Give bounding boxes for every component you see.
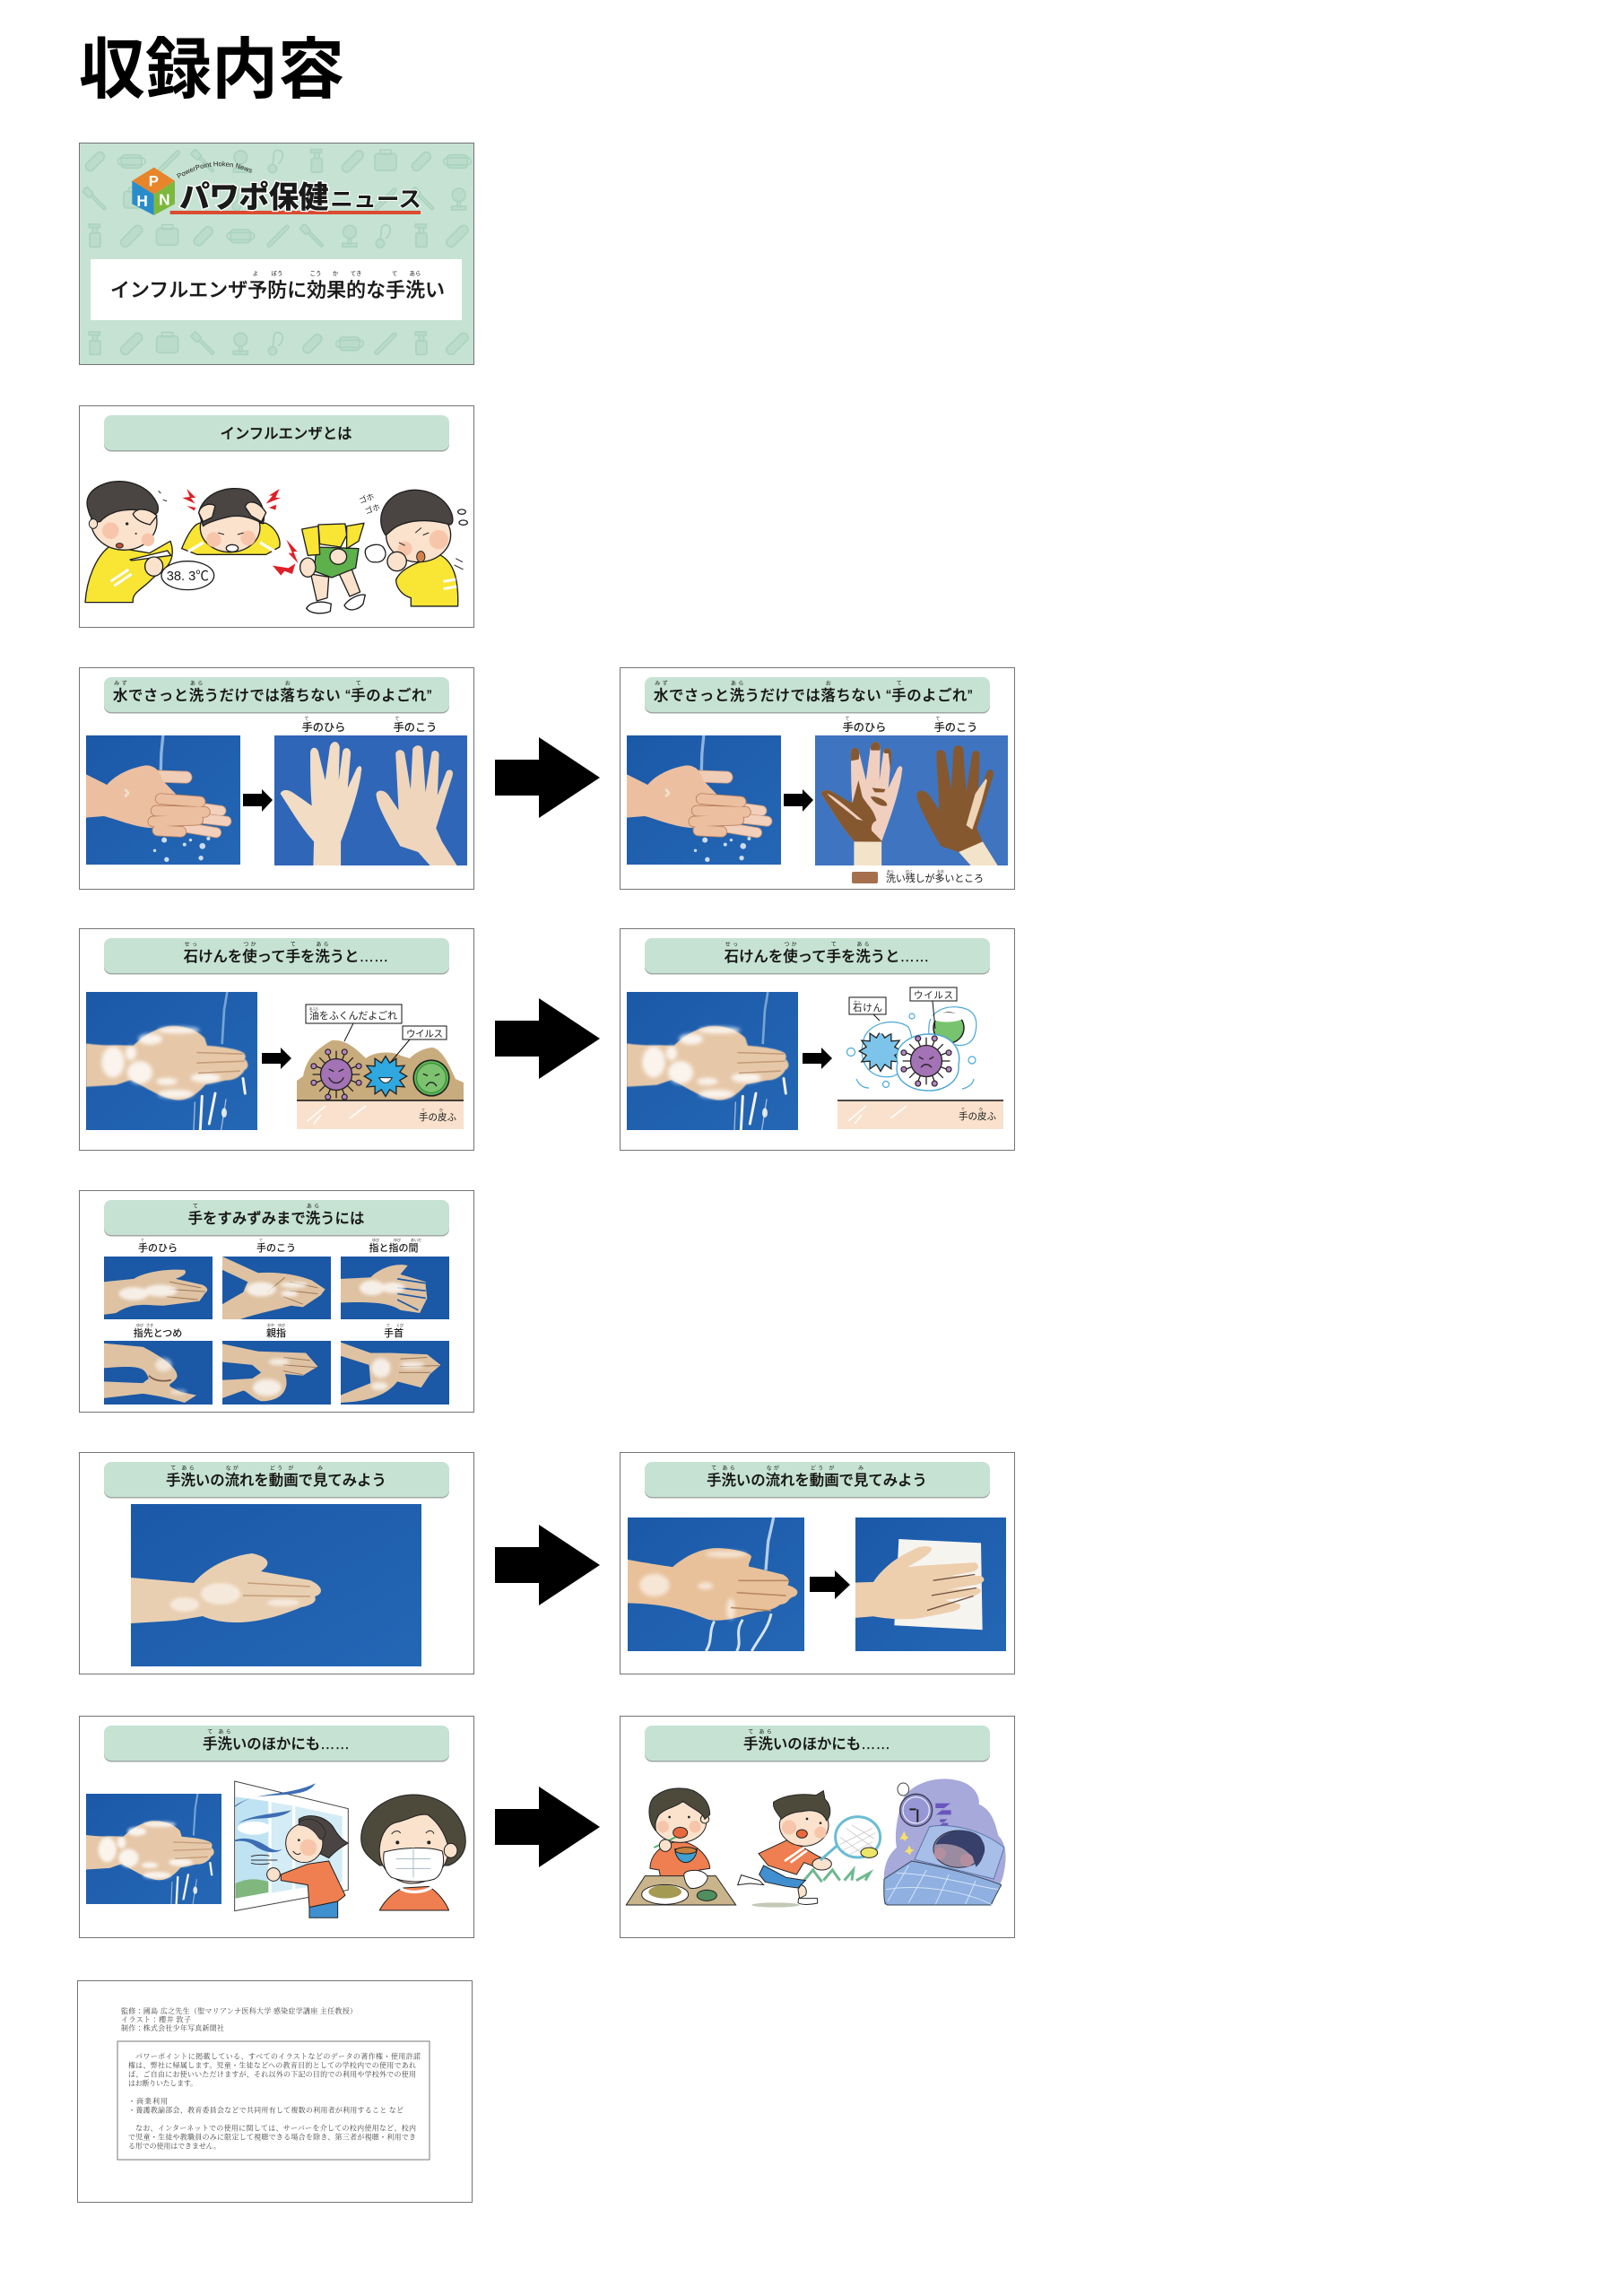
title box: インフルエンザ予防に効果的な手洗い: [90, 258, 461, 319]
photo: 手のこう: て: [258, 1238, 262, 1241]
logo: PowerPoint Hoken News: H: [136, 191, 147, 209]
panel: 動画 (after): [620, 1452, 1015, 1674]
photo: soapy hands: [86, 992, 256, 1130]
labels: て: [845, 716, 849, 721]
legend: 洗い残しが多いところ: [886, 872, 983, 884]
logo: PowerPoint Hoken News: PowerPoint Hoken News: [177, 161, 253, 178]
heading: [644, 677, 990, 712]
photo: 親指: おや: [267, 1322, 274, 1327]
panel: 手をすみずみまで洗うには: [79, 1190, 474, 1413]
heading: 水みず でさっと洗あら うだけでは落お ちない “手て のよごれ”: [113, 682, 432, 704]
photo: rinsing hands: [626, 735, 780, 865]
legend: のこ: [906, 868, 913, 874]
illustration: child playing tennis: [737, 1790, 880, 1907]
terms box: ば、ご自由にお使いいただけますが、それ以外の下記の目的での利用や学校外での使用: [127, 2069, 416, 2078]
heading: [104, 677, 448, 712]
illustration: boy coughing: ゴホ: [357, 491, 375, 505]
heading: [104, 938, 448, 973]
photo: 親指: 親指: [265, 1326, 285, 1338]
photo: 手首: [341, 1322, 448, 1405]
terms box: はお断りいたします。: [127, 2078, 197, 2087]
photo: 指と指の間: 指と指の間: [369, 1241, 418, 1254]
label: 石けん: せっ: [854, 999, 860, 1003]
diagram: dirt on skin: [296, 1039, 463, 1128]
heading: [104, 1462, 448, 1497]
title box: インフルエンザ予防に効果的な手洗い: てき: [350, 269, 361, 276]
photo: 指先とつめ: ゆび: [136, 1322, 143, 1327]
label: 手の皮ふ: ひ: [439, 1107, 443, 1112]
panel: 手のよごれ (after): [620, 667, 1015, 890]
label: 石けん: [848, 997, 886, 1021]
photo: 手のこう: [222, 1238, 330, 1318]
panel: cover slide: [79, 143, 474, 365]
labels: 手のひら: [301, 719, 345, 734]
heading: 手て 洗あら いの流なが れを動どう 画が で見み てみよう: [707, 1466, 927, 1489]
legend: おお: [936, 868, 943, 874]
title box: インフルエンザ予防に効果的な手洗い: こう: [309, 269, 321, 276]
diagram: soap lifts dirt: [838, 1006, 1002, 1128]
labels: て: [935, 716, 940, 721]
photo: 親指: ゆび: [278, 1322, 285, 1327]
terms box: パワーポイントに掲載している、すべてのイラストなどのデータの著作権・使用許諾: [135, 2051, 420, 2060]
arrow: [809, 1570, 850, 1598]
heading: 水みず でさっと洗あら うだけでは落お ちない “手て のよごれ”: [654, 682, 973, 704]
label: 手の皮ふ: て: [961, 1107, 965, 1110]
photo: rinsing hands: [86, 735, 240, 865]
labels: て: [304, 716, 308, 721]
terms box: る形での使用はできません。: [127, 2141, 221, 2150]
illustration: child eating: [626, 1787, 735, 1904]
panel: credits and terms: [77, 1980, 473, 2203]
label: ウイルス: [909, 987, 956, 1028]
heading: 手て 洗あら いのほかにも……: [203, 1730, 350, 1752]
panel: インフルエンザとは: [79, 405, 474, 628]
photo: towel drying: [855, 1518, 1006, 1650]
panel: 動画 (before): [79, 1452, 474, 1674]
photo: video still: [131, 1503, 421, 1666]
photo: 親指: [222, 1322, 330, 1405]
credits: 制作：株式会社少年写真新聞社: [120, 2023, 224, 2032]
heading: [644, 1726, 990, 1761]
heading: 石せっ けんを使つか って手て を洗あら うと……: [184, 943, 388, 965]
terms box: で児童・生徒や教職員のみに限定して視聴できる場合を除き、第三者が視聴・利用でき: [127, 2132, 416, 2141]
labels: て: [395, 716, 399, 721]
panel: 手のよごれ (before): [79, 667, 474, 890]
heading: [644, 938, 990, 973]
labels: 手のこう: [933, 719, 977, 734]
heading: [104, 415, 448, 450]
heading: 手て 洗あら いの流なが れを動どう 画が で見み てみよう: [166, 1466, 386, 1489]
title box: インフルエンザ予防に効果的な手洗い: ぼう: [271, 269, 282, 276]
legend: あら: [886, 868, 893, 874]
title box: インフルエンザ予防に効果的な手洗い: あら: [409, 269, 421, 276]
terms box: ・養護教諭部会、教育委員会などで共同所有して複数の利用者が利用すること など: [127, 2105, 404, 2114]
photo: 手のひら: [104, 1238, 212, 1318]
label: 油をふくんだよごれ: 油をふくんだよごれ: [308, 1008, 396, 1021]
photo: 手のひら: て: [140, 1238, 143, 1241]
photo: 手のひら: 手のひら: [138, 1241, 178, 1254]
labels: [842, 716, 977, 734]
illustration: boy with headache: [181, 488, 281, 554]
heading: 石せっ けんを使つか って手て を洗あら うと……: [725, 943, 929, 965]
photo: soapy hands: [86, 1794, 221, 1903]
label: 手の皮ふ: [958, 1107, 996, 1121]
heading: [104, 1200, 448, 1235]
logo: PowerPoint Hoken News: ニュース: [330, 187, 421, 212]
arrow: [784, 789, 812, 811]
heading: [644, 1462, 990, 1497]
big arrow: [495, 737, 600, 818]
title: 収録内容: [79, 32, 344, 107]
label: 手の皮ふ: て: [421, 1107, 425, 1112]
panel: 手洗いのほかにも (after): [620, 1716, 1015, 1938]
photo: 手首: くび: [396, 1322, 404, 1327]
label: 手の皮ふ: 手の皮ふ: [418, 1110, 456, 1123]
illustration: boy with joint pain: [272, 523, 365, 613]
illustration: opening window: [234, 1780, 348, 1918]
illustration: child sleeping: [883, 1779, 1005, 1904]
big arrow: [495, 998, 600, 1079]
illustration: child with mask: [360, 1794, 465, 1909]
arrow: [802, 1048, 832, 1069]
photo: hands with unwashed areas: [814, 735, 1008, 865]
logo: PowerPoint Hoken News: N: [159, 190, 169, 208]
terms box: 権は、弊社に帰属します。児童・生徒などへの教育目的としての学校内での使用であれ: [127, 2060, 416, 2069]
photo: 指と指の間: ゆび: [371, 1236, 378, 1241]
panel: 石けん (after): [620, 928, 1015, 1151]
logo: PowerPoint Hoken News: パワポ保健: [178, 180, 328, 214]
label: 油をふくんだよごれ: [305, 1004, 402, 1040]
terms box: なお、インターネットでの使用に関しては、サーバーを介しての校内使用など、校内: [135, 2123, 416, 2132]
photo: 手のこう: 手のこう: [256, 1241, 296, 1254]
photo: 指先とつめ: さき: [145, 1322, 152, 1327]
logo: PowerPoint Hoken News: [132, 161, 421, 215]
photo: 指と指の間: ゆび: [393, 1236, 400, 1241]
terms box: ・商業利用: [127, 2096, 167, 2105]
photo: clean hands: [274, 735, 466, 865]
illustration: boy coughing: [357, 490, 467, 605]
credits: [120, 2005, 357, 2032]
label: ウイルス: ウイルス: [913, 990, 952, 1001]
label: 手の皮ふ: [418, 1107, 456, 1123]
panel: 手洗いのほかにも (before): [79, 1716, 474, 1938]
big arrow: [495, 1787, 600, 1867]
heading: インフルエンザとは: [220, 426, 352, 442]
credits: イラスト：櫻井 敦子: [120, 2014, 190, 2023]
labels: 手のこう: [393, 719, 437, 734]
title box: インフルエンザ予防に効果的な手洗い: て: [391, 271, 397, 276]
illustration: boy with fever: [84, 481, 213, 602]
photo: rinsing soap: [628, 1518, 803, 1650]
legend: [852, 868, 983, 884]
background health icon pattern: [82, 149, 471, 356]
panel: 石けん (before): [79, 928, 474, 1151]
photo: 手首: 手首: [384, 1326, 404, 1338]
credits: 監修：國島 広之先生（聖マリアンナ医科大学 感染症学講座 主任教授）: [120, 2005, 357, 2014]
big arrow: [495, 1525, 600, 1605]
logo: PowerPoint Hoken News: P: [148, 172, 158, 189]
labels: [301, 716, 437, 734]
label: 手の皮ふ: ひ: [979, 1107, 983, 1110]
label: 油をふくんだよごれ: あぶら: [308, 1006, 318, 1010]
arrow: [242, 789, 273, 811]
label: ウイルス: [389, 1026, 447, 1062]
illustration: boy coughing: ゴホ: [363, 500, 381, 516]
label: 手の皮ふ: 手の皮ふ: [958, 1110, 996, 1121]
heading: 手て 洗あら いのほかにも……: [743, 1730, 890, 1752]
photo: 指と指の間: [341, 1236, 448, 1318]
arrow: [262, 1048, 291, 1069]
photo: 指先とつめ: [104, 1322, 212, 1405]
photo: 手首: て: [386, 1322, 389, 1327]
title box: インフルエンザ予防に効果的な手洗い: よ: [252, 269, 258, 276]
label: 石けん: 石けん: [852, 1003, 882, 1013]
photo: 指先とつめ: 指先とつめ: [133, 1326, 182, 1338]
heading: 手て をすみずみまで洗あら うには: [188, 1205, 364, 1227]
terms box: [117, 2041, 429, 2160]
title box: インフルエンザ予防に効果的な手洗い: か: [332, 269, 338, 276]
illustration: boy with fever: 38. 3℃: [166, 569, 209, 583]
label: ウイルス: ウイルス: [405, 1028, 443, 1039]
labels: 手のひら: [842, 719, 886, 734]
photo: 指と指の間: あいだ: [411, 1236, 421, 1241]
title box: インフルエンザ予防に効果的な手洗い: インフルエンザ予防に効果的な手洗い: [109, 278, 445, 301]
heading: [104, 1726, 448, 1761]
photo: soapy hands: [626, 992, 798, 1130]
